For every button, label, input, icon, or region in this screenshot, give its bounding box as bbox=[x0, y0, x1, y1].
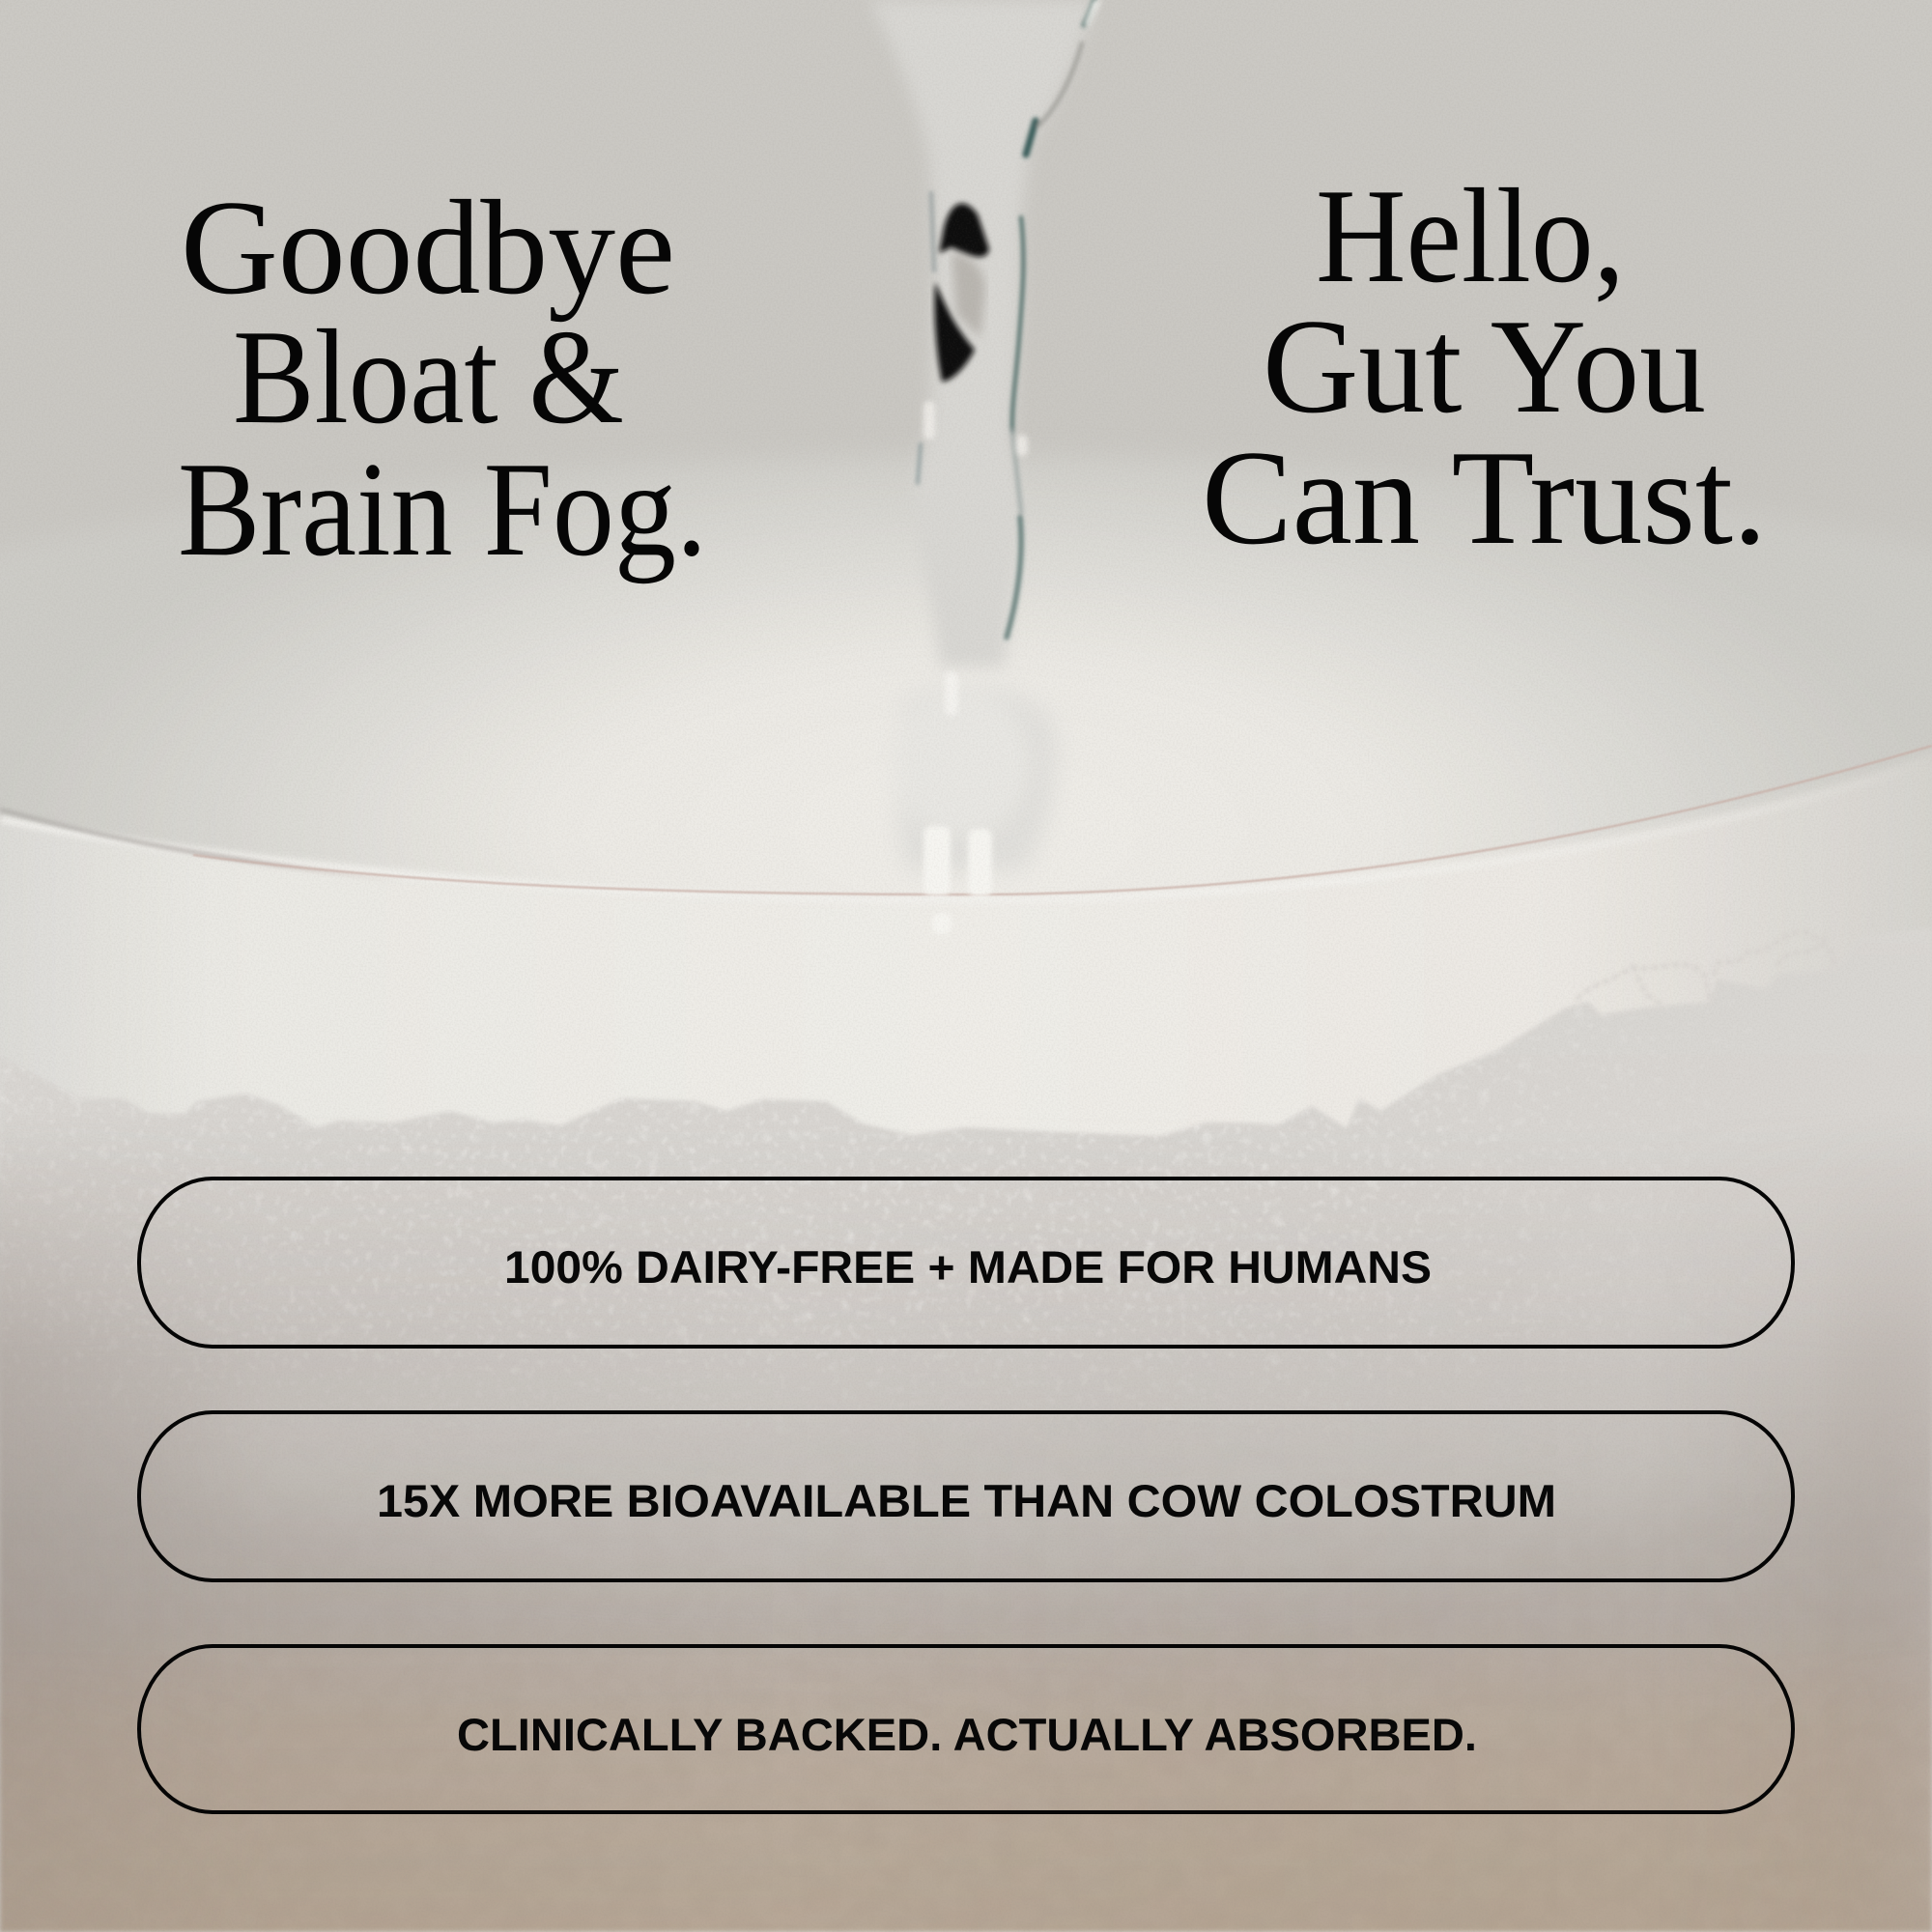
soft pale centre of glass base bbox=[193, 1323, 1739, 1575]
heading left: Goodbye Bloat & Brain Fog.: Bloat & bbox=[233, 302, 624, 452]
heading right: Hello, Gut You Can Trust.: Gut You bbox=[1263, 292, 1706, 441]
stream lower splash bbox=[904, 709, 1053, 867]
foam bubble speckle bbox=[0, 966, 1932, 1468]
heading left: Goodbye Bloat & Brain Fog.: Brain Fog. bbox=[178, 435, 707, 584]
base mottling bbox=[0, 1401, 1932, 1932]
glass rim line bbox=[0, 746, 1932, 895]
heading right: Hello, Gut You Can Trust. bbox=[1202, 161, 1767, 573]
pill: 100% dairy-free: 100% DAIRY-FREE + MADE FOR HUMANS bbox=[504, 1241, 1432, 1293]
heading right: Hello, Gut You Can Trust.: Can Trust. bbox=[1202, 423, 1767, 573]
stream white highlights bbox=[923, 0, 1101, 934]
heading left: Goodbye Bloat & Brain Fog.: Goodbye bbox=[181, 173, 675, 323]
left shadow and right tone bbox=[0, 1111, 1932, 1932]
stream dark refraction bbox=[939, 204, 989, 257]
liquid surface inside glass bbox=[132, 466, 1799, 896]
milk body and foam line bbox=[0, 927, 1932, 1932]
heading right: Hello, Gut You Can Trust.: Hello, bbox=[1316, 161, 1625, 311]
pill: clinically backed: CLINICALLY BACKED. ACTUALLY ABSORBED. bbox=[457, 1709, 1477, 1760]
stream teal edges bbox=[918, 0, 1094, 638]
glass rim highlight bbox=[0, 815, 377, 871]
heading left: Goodbye Bloat & Brain Fog. bbox=[178, 173, 707, 584]
pill: 100% dairy-free bbox=[139, 1179, 1793, 1347]
outer glass wall bbox=[0, 763, 1932, 1137]
foam lace on right bbox=[1577, 931, 1833, 1005]
benefit pills bbox=[139, 1179, 1793, 1812]
water stream bbox=[869, 0, 1101, 934]
pill: 15x more bioavailable bbox=[139, 1412, 1793, 1580]
pill: clinically backed bbox=[139, 1646, 1793, 1812]
pill: 15x more bioavailable: 15X MORE BIOAVAILABLE THAN COW COLOSTRUM bbox=[377, 1475, 1556, 1526]
